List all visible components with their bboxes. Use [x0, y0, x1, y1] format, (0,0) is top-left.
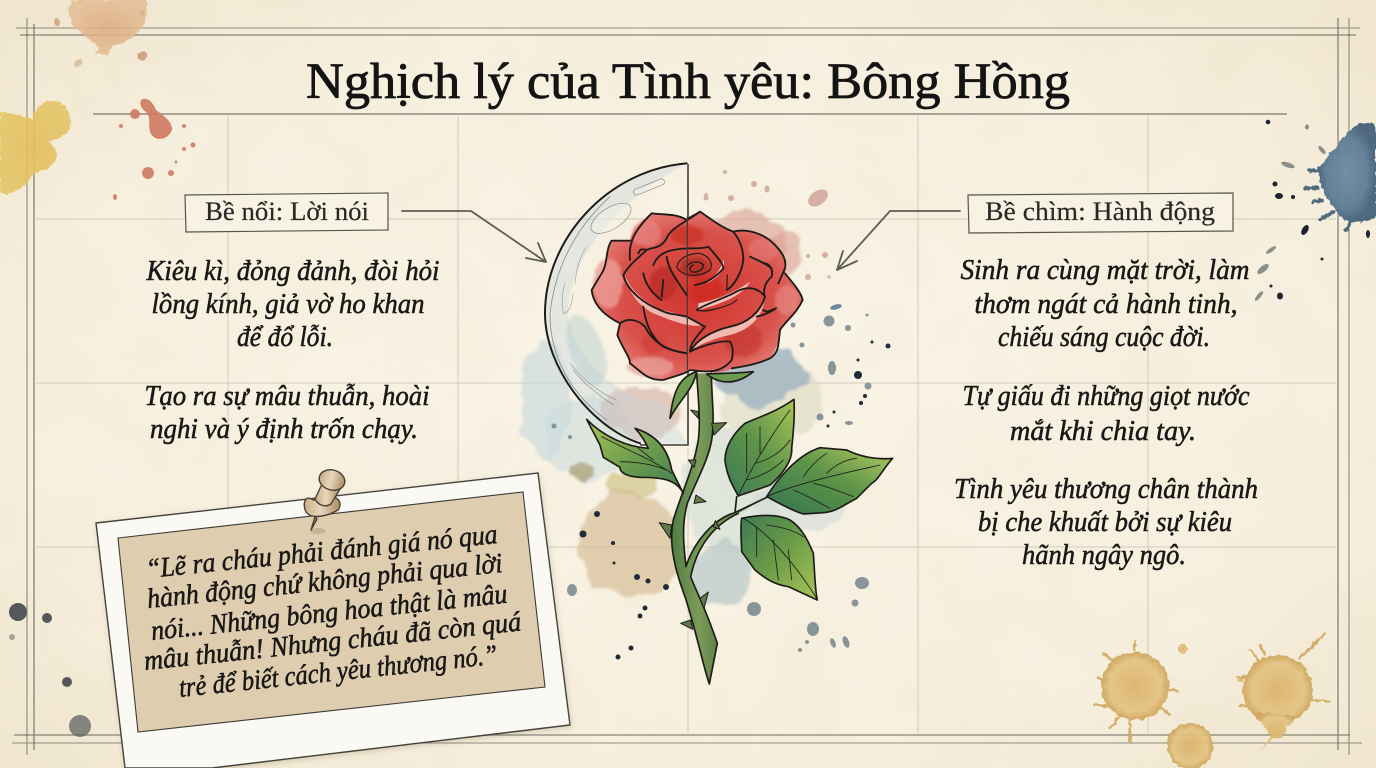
right label: depth, actions: Bề chìm: Hành động — [985, 197, 1215, 226]
splatter: blue-grey — [552, 303, 872, 652]
left text block: để đổ lỗi. — [237, 321, 333, 353]
left label: surface, words: Bề nổi: Lời nói — [205, 197, 369, 226]
right text block: Sinh ra cùng mặt trời, làm — [960, 254, 1250, 286]
stain: bottom right yellow — [1094, 634, 1330, 768]
right text block: bị che khuất bởi sự kiêu — [978, 506, 1232, 538]
stain: left yellow — [0, 102, 71, 194]
center vertical line over bloom — [686, 217, 689, 370]
glass bubble — [545, 163, 687, 443]
splatter: grey right — [1254, 124, 1327, 302]
right label: depth, actions — [968, 193, 1233, 233]
arrow: right label to rose — [837, 211, 960, 270]
right text block — [954, 254, 1258, 571]
right text block: thơm ngát cả hành tinh, — [974, 288, 1238, 320]
bloom ink outlines — [592, 212, 803, 380]
arrow: left label to rose — [402, 211, 546, 262]
stain: right blue — [1305, 123, 1376, 230]
splatter: ink right — [1266, 120, 1370, 300]
title: Nghịch lý của Tình yêu: Bông Hồng — [306, 54, 1070, 110]
sketched grid lines — [36, 116, 1336, 733]
illustration: rose — [519, 163, 893, 684]
left text block: Tạo ra sự mâu thuẫn, hoài — [144, 380, 430, 412]
quote text: trẻ để biết cách yêu thương nó.” — [177, 640, 499, 704]
leaf: bottom — [741, 515, 817, 600]
quote text: hành động chứ không phải qua lời — [146, 548, 504, 615]
left text block: lồng kính, giả vờ ho khan — [152, 288, 424, 320]
leaf: left — [587, 419, 683, 493]
stem and leaves — [587, 373, 893, 684]
sepals — [670, 372, 753, 418]
stain: top left tan — [54, 0, 148, 69]
right text block: hãnh ngây ngô. — [1022, 539, 1186, 571]
tan panel — [118, 492, 545, 732]
left text block — [144, 255, 440, 445]
petal shading — [593, 220, 798, 376]
splatter: dark ink — [580, 340, 890, 660]
left text block: nghi và ý định trốn chạy. — [150, 413, 418, 445]
right text block: Tình yêu thương chân thành — [954, 473, 1258, 505]
rose center divider line — [640, 164, 688, 445]
left text block: Kiêu kì, đỏng đảnh, đòi hỏi — [146, 255, 440, 287]
stem — [659, 373, 767, 684]
quote text — [142, 519, 523, 704]
quote text: mâu thuẫn! Nhưng cháu đã còn quá — [142, 607, 523, 677]
left label: surface, words — [185, 193, 388, 232]
petal highlights — [625, 260, 765, 350]
splatter around rose — [552, 170, 890, 660]
splatter: pink — [704, 170, 831, 280]
icon: push pin — [304, 467, 347, 534]
quote text: nói... Những bông hoa thật là mâu — [149, 579, 509, 647]
splatter: red — [113, 99, 196, 200]
photo note with quote — [96, 467, 570, 768]
quote text: “Lẽ ra cháu phải đánh giá nó qua — [145, 519, 499, 585]
leaf: top center — [725, 399, 794, 496]
watercolor wash behind rose — [519, 214, 842, 607]
right text block: mắt khi chia tay. — [1010, 415, 1196, 447]
right text block: Tự giấu đi những giọt nước — [962, 380, 1250, 412]
splatter: grey bottom left — [9, 603, 91, 737]
white paper card — [96, 473, 570, 768]
rose bloom — [592, 212, 803, 418]
bloom silhouette — [592, 212, 803, 380]
right text block: chiếu sáng cuộc đời. — [998, 321, 1210, 353]
leaf: right — [767, 448, 893, 514]
